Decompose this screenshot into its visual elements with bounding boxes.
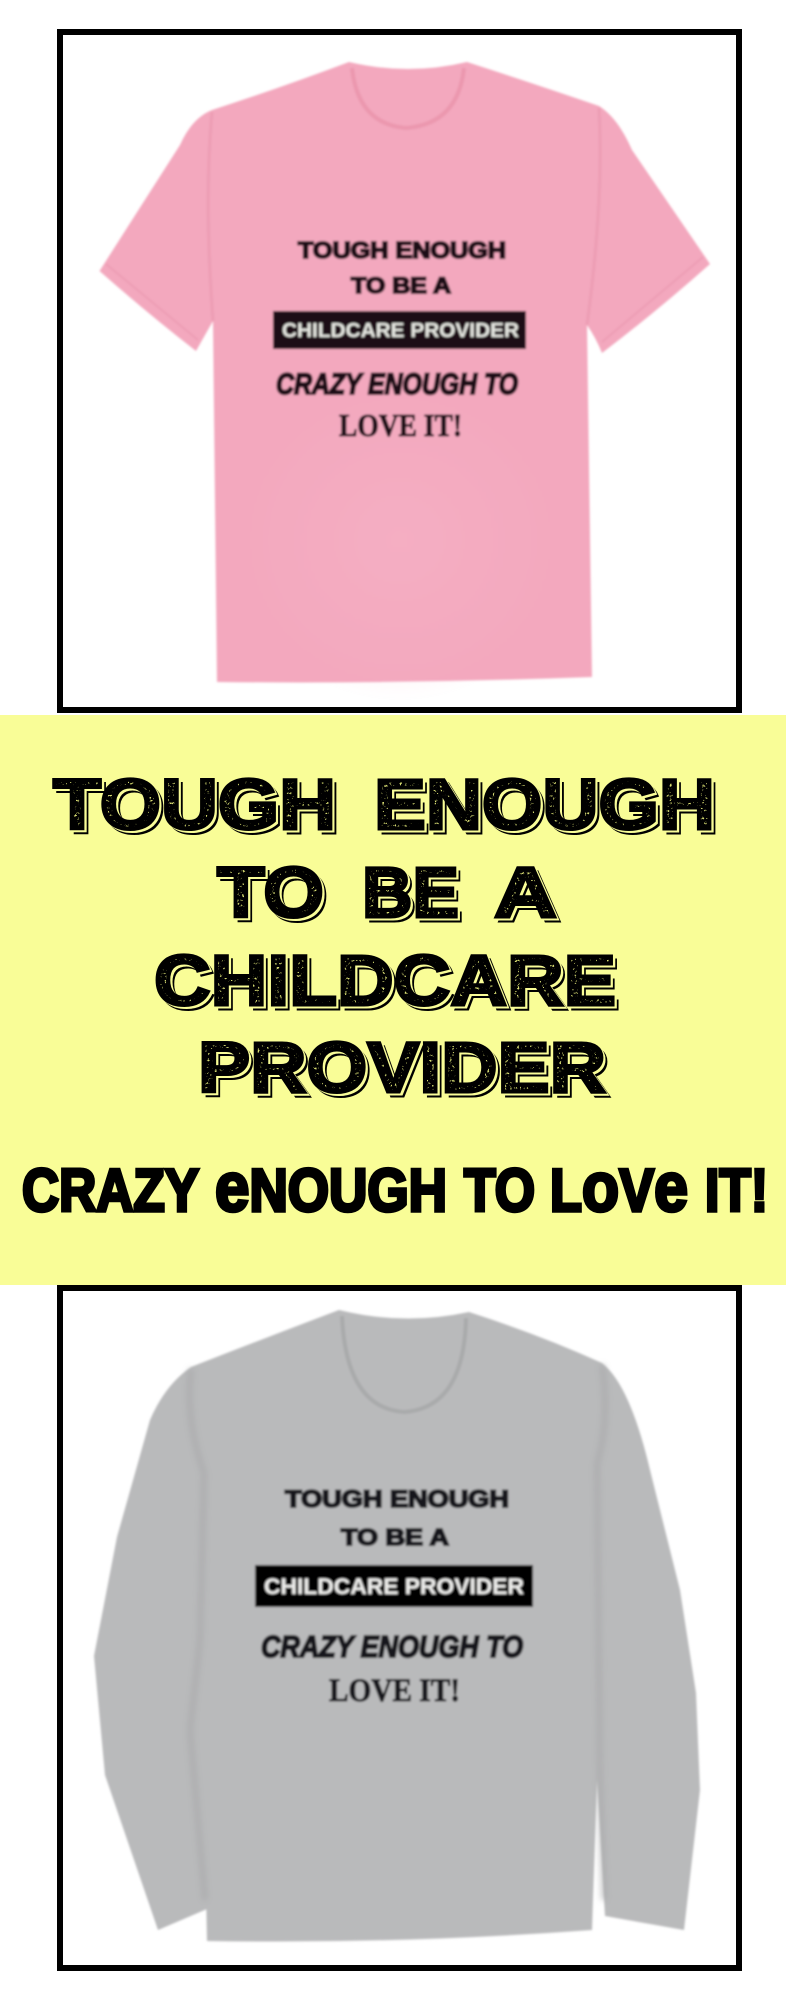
shirt highlight (230, 380, 570, 700)
shirt print: TO BE A (351, 273, 451, 298)
heading inset line: BE (364, 856, 461, 935)
heading shadow outline: BE (366, 858, 463, 937)
sleeve seams (190, 1365, 605, 1900)
subheading: crazy enough to love it (22, 1148, 768, 1226)
frame (60, 32, 739, 710)
heading shadow outline: TO (221, 858, 328, 937)
panel: grey long-sleeve shirt photo (60, 1288, 739, 1968)
shirt print: CRAZY ENOUGH TO (261, 1629, 523, 1664)
heading shadow outline: PROVIDER (202, 1033, 610, 1112)
frame (60, 1288, 739, 1968)
shirt print (255, 1486, 533, 1709)
subheading: crazy enough to love it: IT! (705, 1157, 768, 1224)
subheading: crazy enough to love it: TO (464, 1157, 535, 1224)
collar (352, 68, 464, 128)
heading inset line (55, 768, 717, 1110)
heading inset line: TOUGH (55, 768, 338, 847)
subheading: crazy enough to love it: eNOUGH (215, 1148, 447, 1226)
shirt body and sleeves (94, 1310, 700, 1942)
heading shadow outline: A (498, 858, 561, 937)
heading: tough enough to be a childcare provider: ENOUGH (374, 766, 715, 845)
grey long-sleeve shirt (94, 1310, 700, 1942)
shirt print: LOVE IT! (329, 1673, 460, 1709)
panel: pink t-shirt photo (60, 32, 739, 710)
heading shadow outline: TOUGH (57, 770, 340, 849)
shirt print: TO BE A (341, 1524, 449, 1550)
heading shadow outline: ENOUGH (378, 770, 719, 849)
subheading: crazy enough to love it: CRAZY (22, 1157, 199, 1224)
heading: tough enough to be a childcare provider: BE (362, 854, 459, 933)
heading inset line: CHILDCARE (156, 944, 618, 1023)
heading: tough enough to be a childcare provider: A (494, 854, 557, 933)
shirt print: CRAZY ENOUGH TO (276, 368, 518, 401)
panel: yellow title block (0, 715, 786, 1285)
pink t-shirt (100, 62, 710, 700)
heading inset line: TO (219, 856, 326, 935)
shirt print: TOUGH ENOUGH (285, 1486, 509, 1513)
heading: tough enough to be a childcare provider (53, 766, 715, 1108)
heading inset line: PROVIDER (200, 1031, 608, 1110)
heading inset line: ENOUGH (376, 768, 717, 847)
sleeve seams (106, 108, 703, 342)
heading: tough enough to be a childcare provider: PROVIDER (198, 1029, 606, 1108)
heading shadow outline (57, 770, 719, 1112)
yellow background (0, 715, 786, 1285)
collar (342, 1316, 466, 1412)
shirt print (273, 237, 526, 443)
heading inset line: A (496, 856, 559, 935)
heading shadow outline: CHILDCARE (158, 946, 620, 1025)
shirt print: CHILDCARE PROVIDER (264, 1574, 524, 1599)
shirt body (100, 62, 710, 682)
subheading: crazy enough to love it: LoVe (550, 1148, 688, 1226)
heading: tough enough to be a childcare provider: TOUGH (53, 766, 336, 845)
heading: tough enough to be a childcare provider: CHILDCARE (154, 942, 616, 1021)
shirt print: TOUGH ENOUGH (298, 237, 506, 263)
heading: tough enough to be a childcare provider: TO (217, 854, 324, 933)
shirt print: LOVE IT! (339, 407, 462, 443)
shirt print: CHILDCARE PROVIDER (282, 320, 520, 342)
